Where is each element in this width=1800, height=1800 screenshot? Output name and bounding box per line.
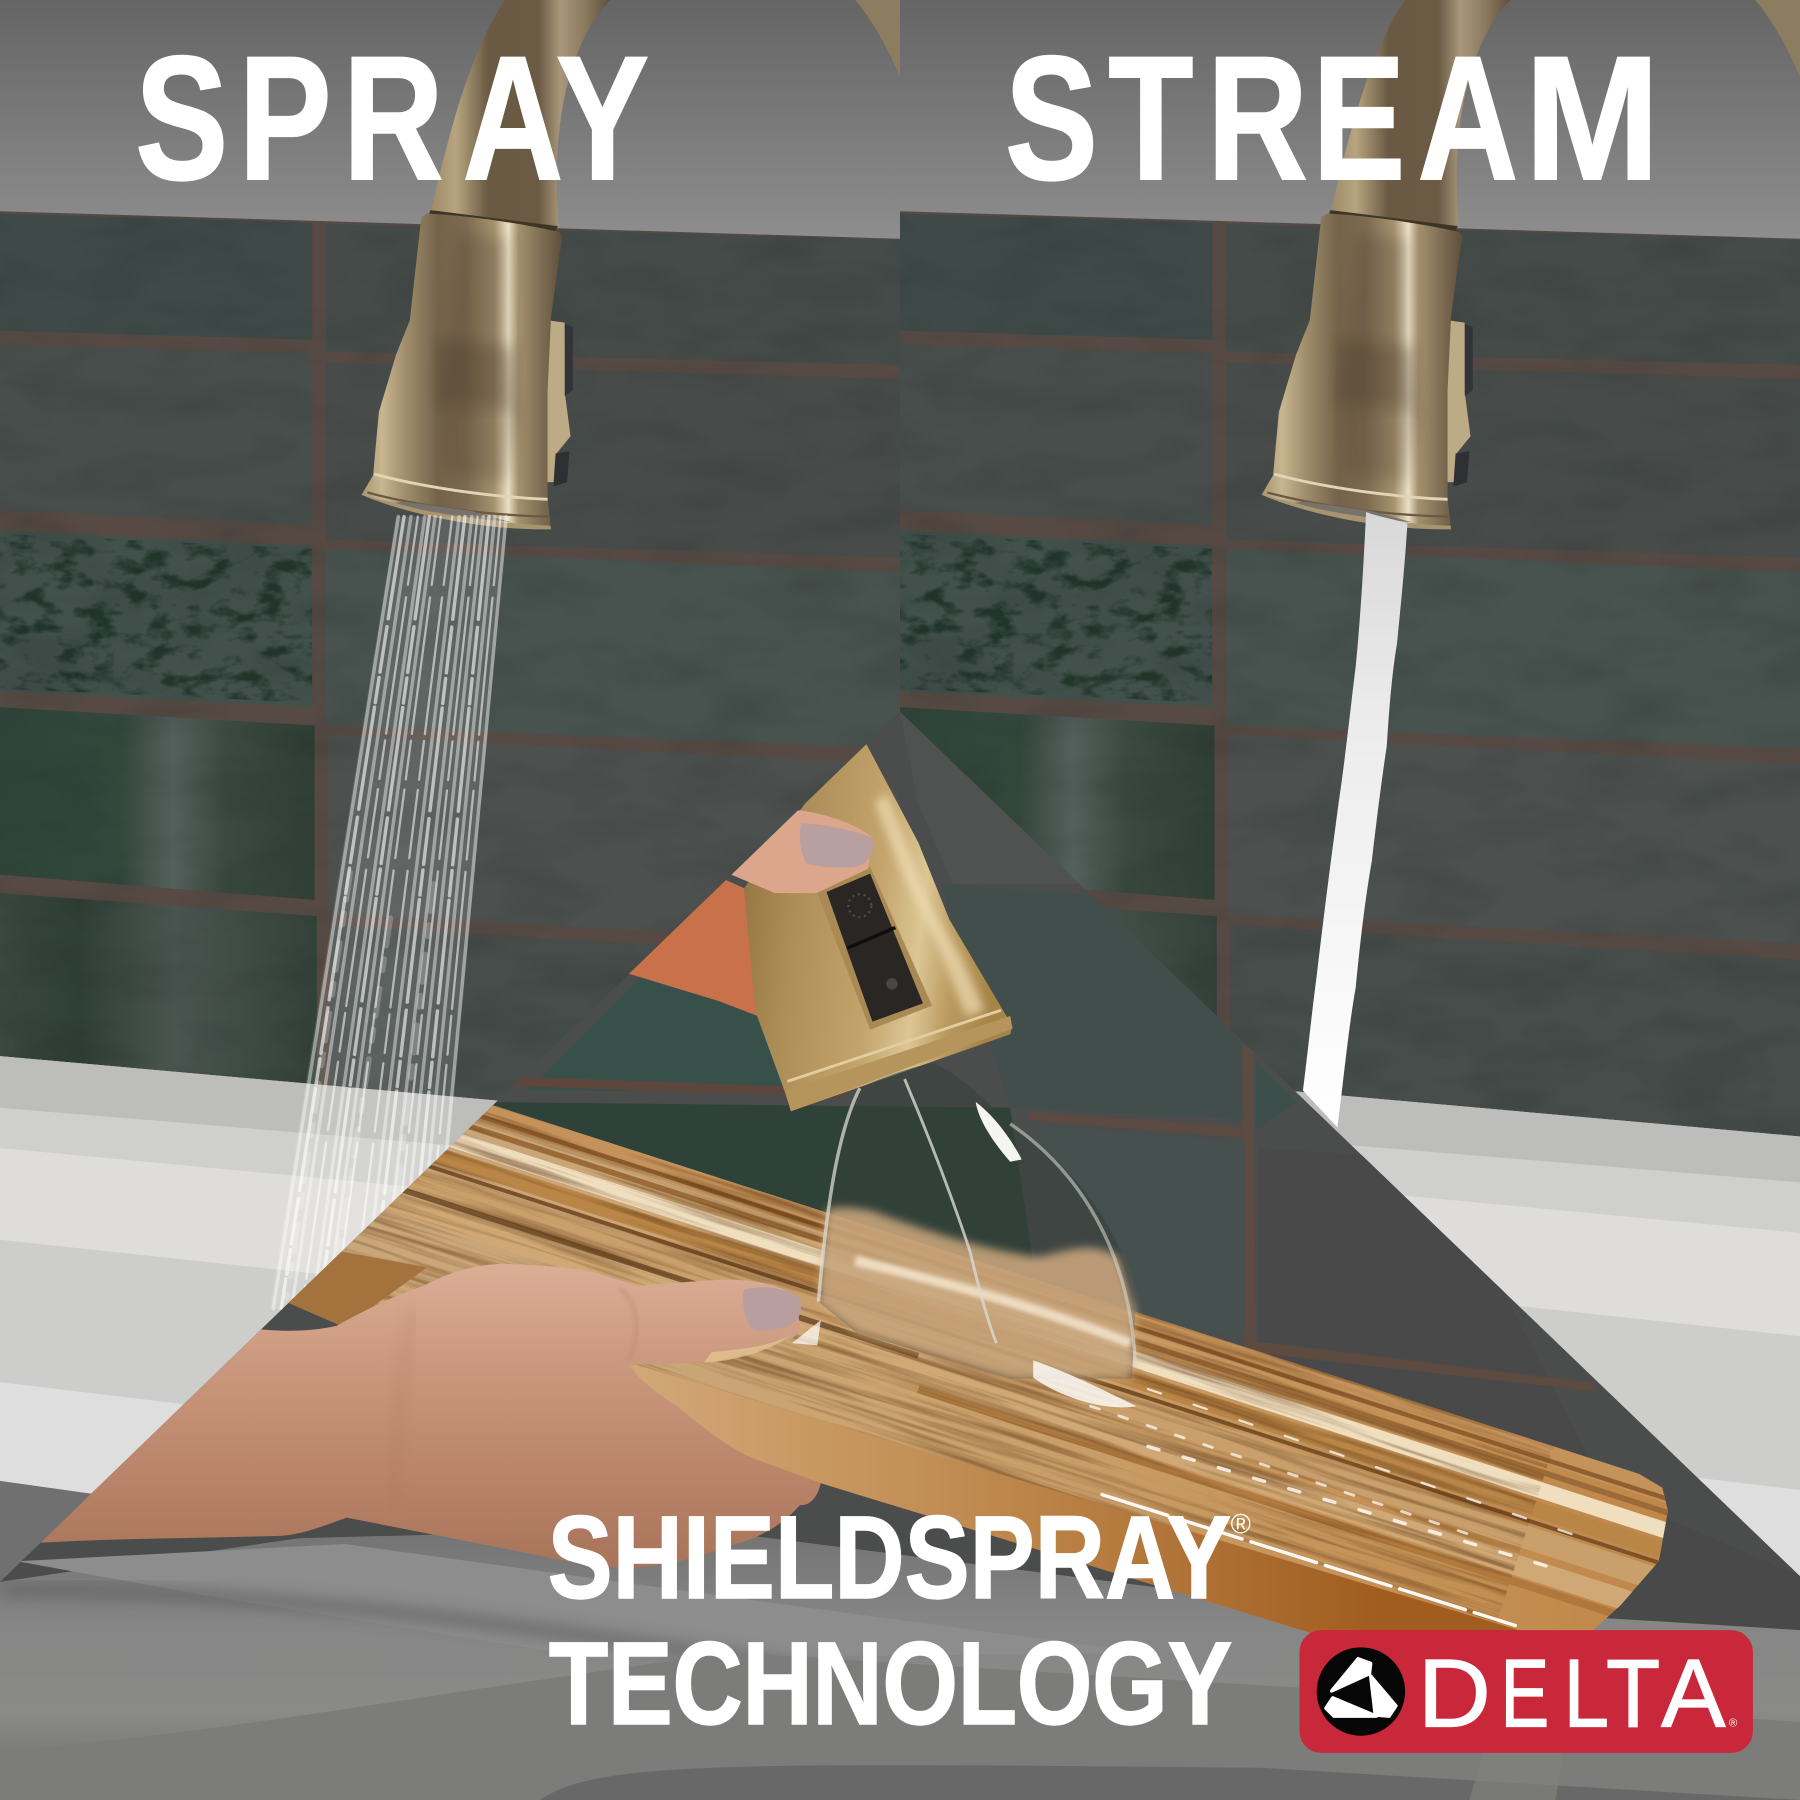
caption: ShieldSpray Technology: ® (1231, 1509, 1251, 1540)
countertop (0, 1056, 900, 1800)
photo wedge: ShieldSpray board rinsing (0, 712, 1800, 1800)
other fingers behind spray head (628, 879, 758, 1016)
wedge tile wall (0, 712, 1800, 1688)
pull-down spray head (362, 214, 573, 540)
heading: STREAM: STREA (1005, 19, 1518, 217)
logo: Delta badge (1299, 1630, 1753, 1753)
grey wall above tiles (0, 0, 900, 241)
wordmark: A (1661, 1641, 1726, 1748)
gooseneck spout (428, 0, 907, 231)
stream of water (1303, 512, 1407, 1127)
wordmark: T (1606, 1639, 1660, 1747)
index finger on button (729, 810, 873, 893)
wordmark (1418, 1639, 1726, 1748)
heading: SPRAY: SPRAY (135, 19, 649, 217)
bell of water (792, 1063, 1136, 1407)
wordmark: L (1564, 1639, 1609, 1747)
caption: ShieldSpray Technology: TECHNOLOGY (549, 1617, 1233, 1749)
right photo: stream background scene (900, 0, 1800, 1576)
spray toggle button (817, 867, 932, 1030)
heading: STREAM: M (1524, 19, 1660, 217)
hand gripping board (36, 1264, 821, 1568)
thumb fingernail (743, 1287, 801, 1331)
wood grain (288, 1106, 1554, 1622)
caption: ShieldSpray Technology: SHIELDSPRAY (548, 1491, 1231, 1623)
left photo: spray background scene (0, 0, 900, 1494)
painted fingernail (800, 823, 873, 868)
mottled tile glaze (0, 528, 321, 712)
wordmark: D (1418, 1640, 1491, 1747)
caption: ShieldSpray Technology (548, 1491, 1251, 1749)
tile backsplash (0, 211, 900, 1153)
board front face (633, 1364, 1518, 1633)
sink basin (0, 1528, 1800, 1800)
logo: Delta badge: ® (1729, 1718, 1738, 1730)
wordmark: E (1500, 1640, 1549, 1748)
cutting board (288, 1105, 1668, 1633)
spray water streams (270, 517, 507, 1309)
icon: Delta tri-blade mark (1317, 1647, 1405, 1736)
spray head held in hand (744, 740, 1012, 1111)
